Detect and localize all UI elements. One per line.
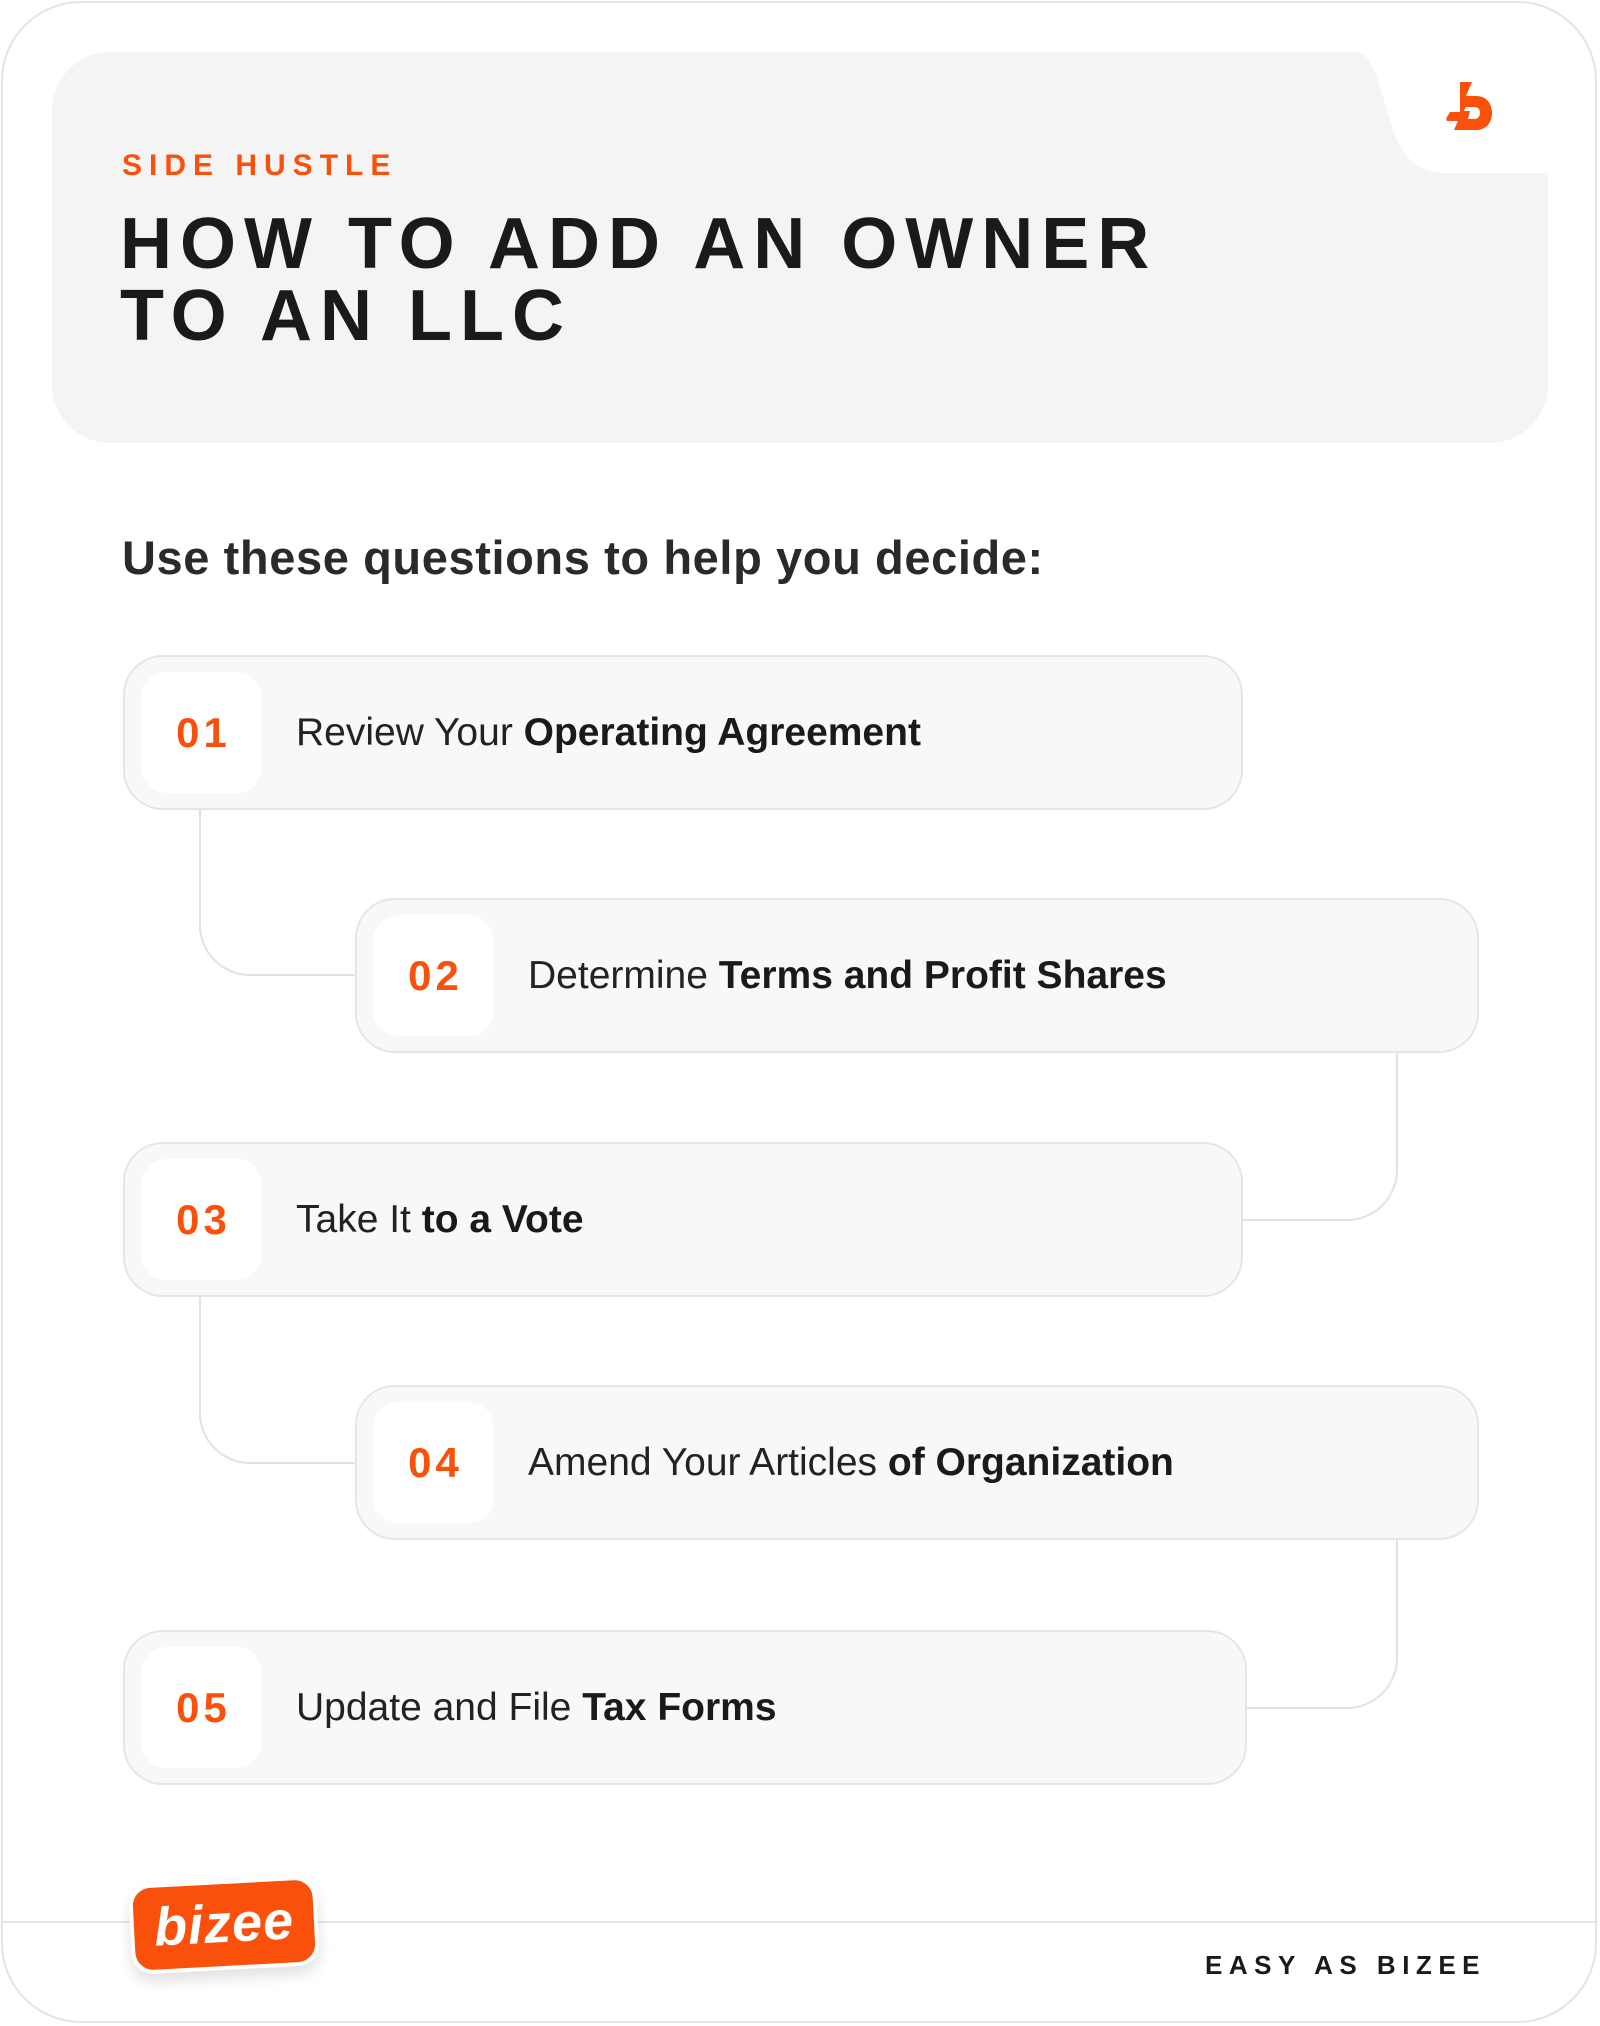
step 03: 03 — [176, 1196, 231, 1243]
step 01 — [123, 655, 1243, 810]
icon: bizee mark — [1446, 82, 1492, 130]
title: HOW TO ADD AN OWNER — [120, 204, 1157, 284]
eyebrow: side hustle: SIDE HUSTLE — [122, 149, 397, 182]
header panel — [52, 52, 1548, 443]
step 05 — [123, 1630, 1247, 1785]
title: TO AN LLC — [120, 276, 572, 356]
step 02: Determine Terms and Profit Shares — [528, 954, 1167, 997]
step 03: Take It to a Vote — [296, 1198, 584, 1241]
step 02 — [355, 898, 1479, 1053]
footer divider — [2, 1921, 1598, 1923]
subtitle: Use these questions to help you decide: — [122, 531, 1044, 584]
step 04: 04 — [408, 1439, 463, 1486]
title — [120, 204, 1157, 356]
tagline: EASY AS BIZEE — [1205, 1950, 1486, 1980]
step 04 — [355, 1385, 1479, 1540]
step 04: Amend Your Articles of Organization — [528, 1441, 1174, 1484]
step 01: 01 — [176, 709, 231, 756]
step 05: Update and File Tax Forms — [296, 1686, 777, 1729]
step 03 — [123, 1142, 1243, 1297]
step 02: 02 — [408, 952, 463, 999]
logo: bizee — [128, 1875, 320, 1975]
logo: bizee: bizee — [152, 1890, 295, 1958]
step 05: 05 — [176, 1684, 231, 1731]
step 01: Review Your Operating Agreement — [296, 711, 921, 754]
